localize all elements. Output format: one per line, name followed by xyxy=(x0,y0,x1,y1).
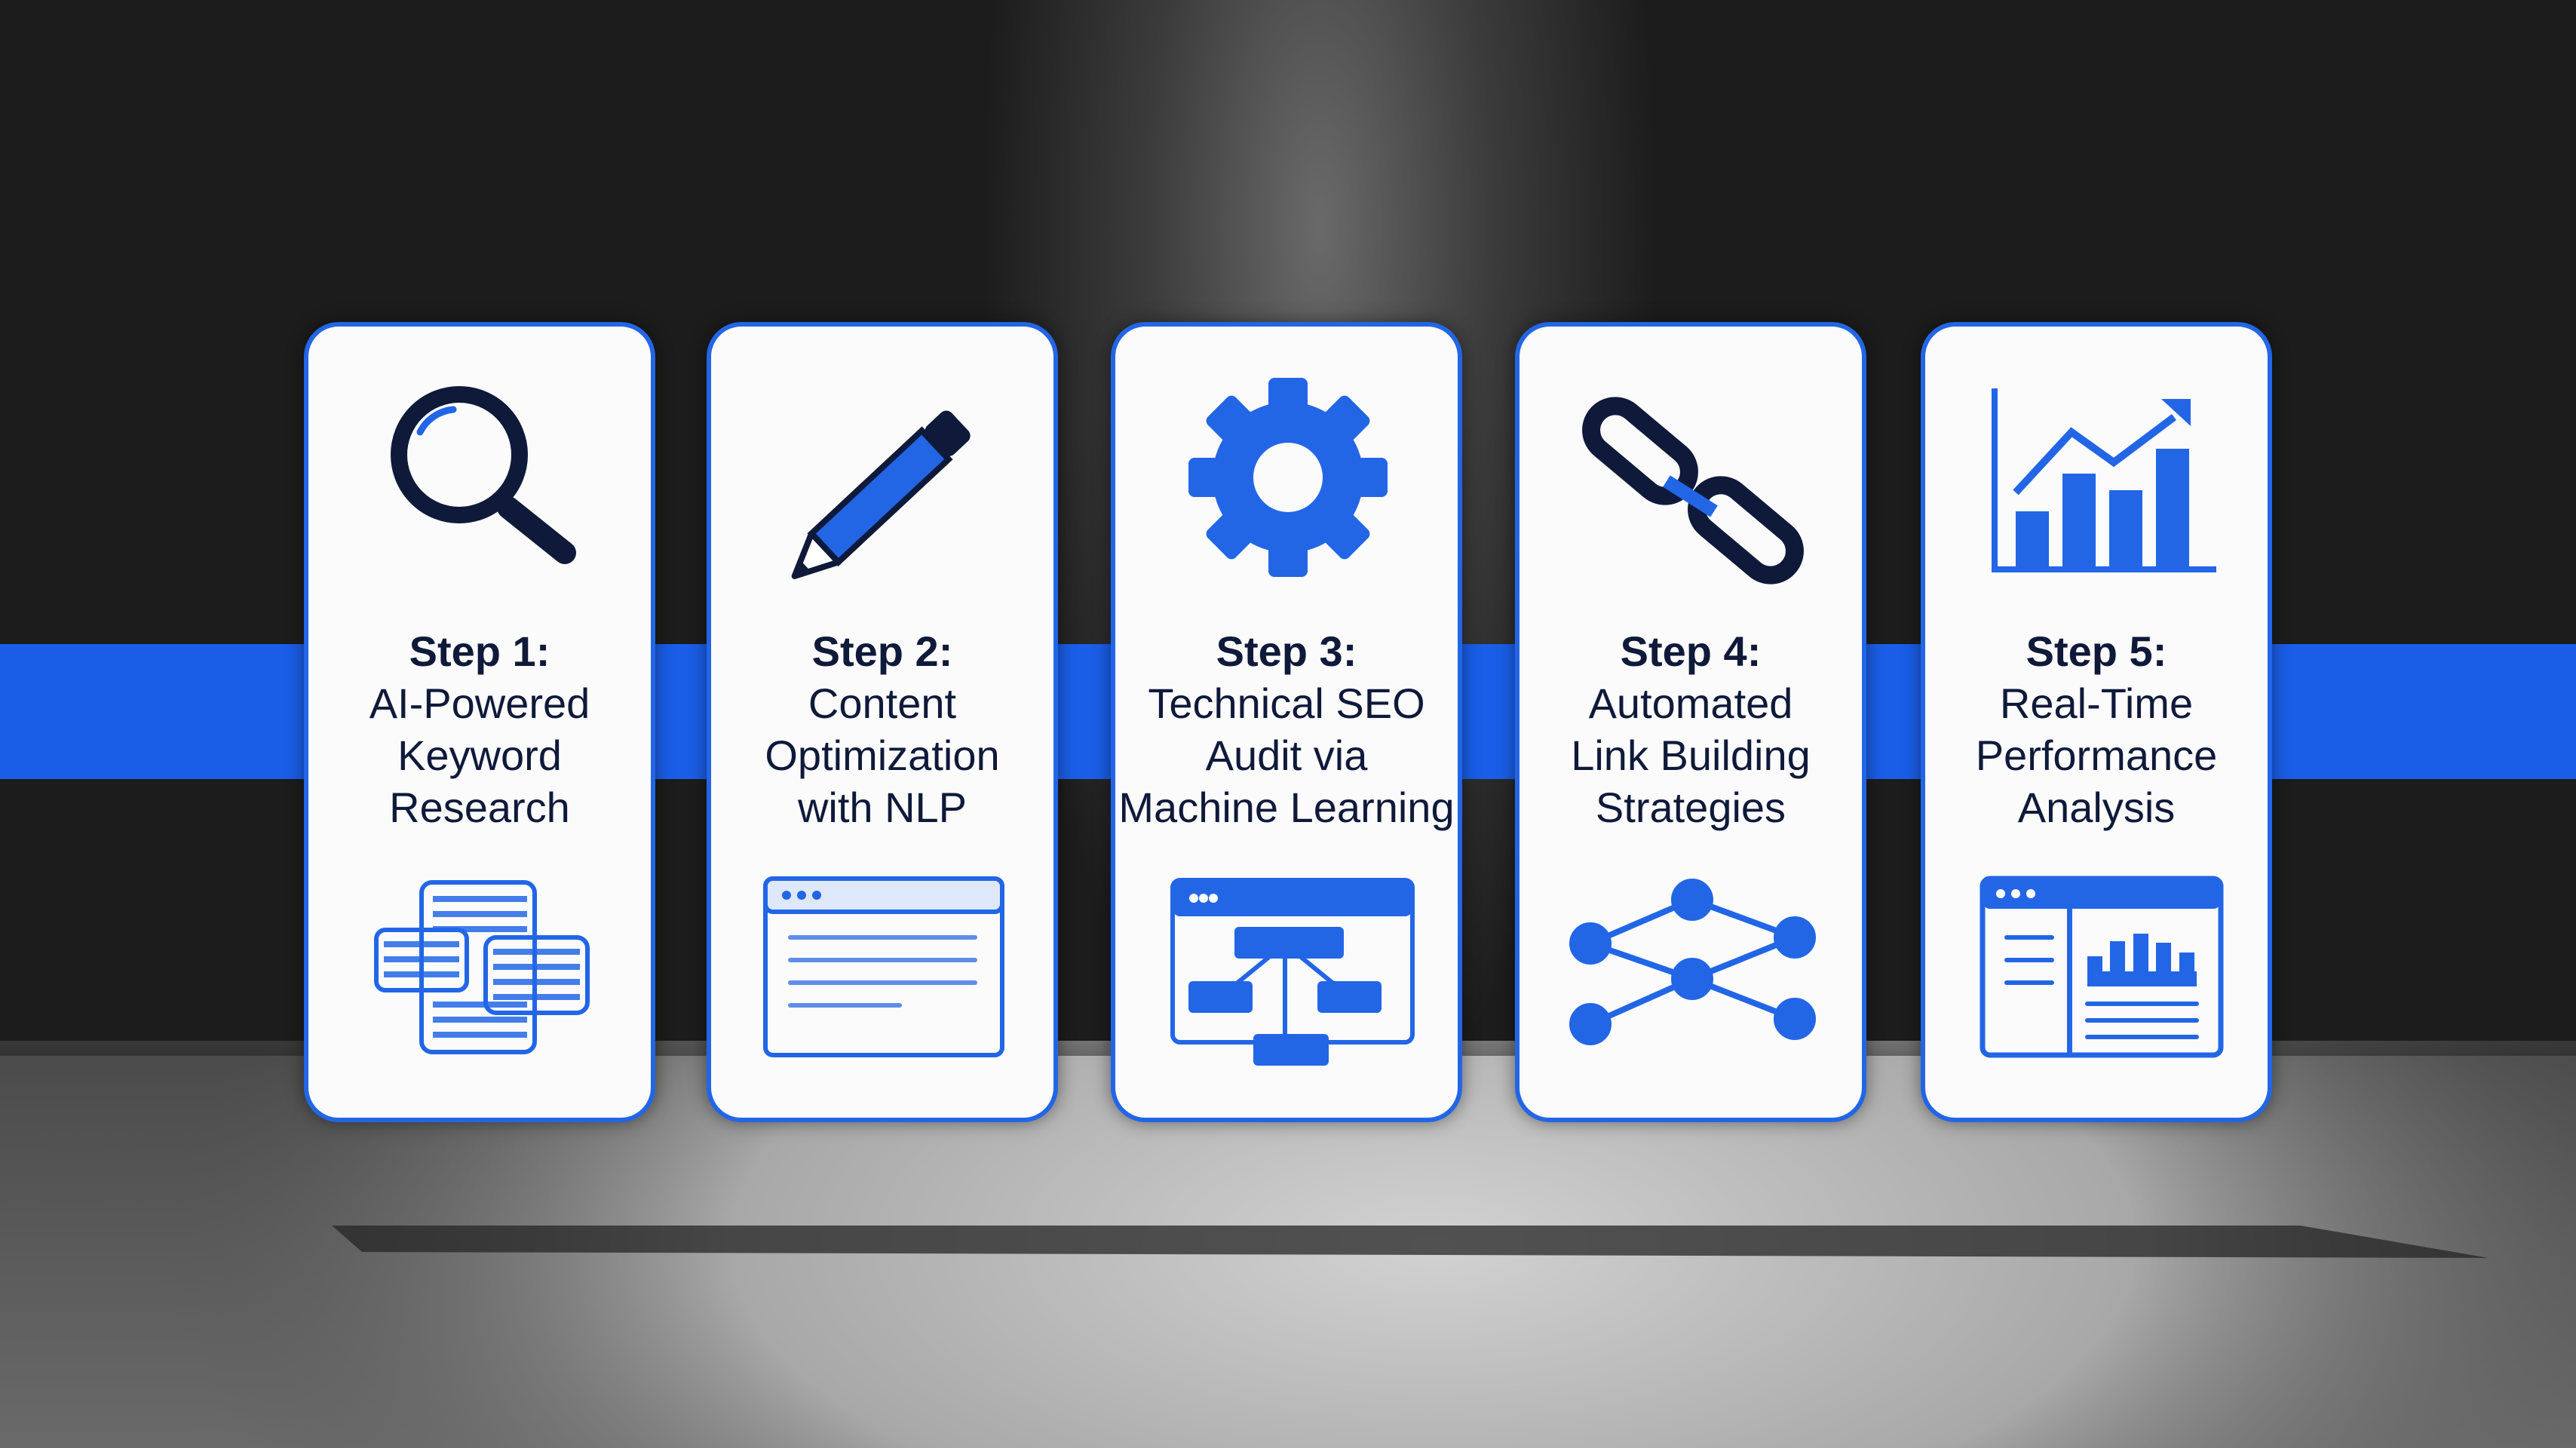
text: step 4: Step 4: xyxy=(1621,627,1761,675)
card 2 xyxy=(707,322,1058,1122)
text: step 2: Optimization xyxy=(765,732,1000,779)
icon: sitemap window xyxy=(1173,880,1412,1066)
icon: pencil xyxy=(780,407,974,591)
card 1 xyxy=(304,322,655,1122)
text: step 5 xyxy=(1976,627,2217,831)
text: step 3 xyxy=(1118,627,1455,831)
text: step 3: Machine Learning xyxy=(1118,784,1455,831)
icon: document window xyxy=(765,879,1002,1055)
icon: magnifier xyxy=(399,394,565,553)
text: step 3: Step 3: xyxy=(1216,627,1357,675)
text: step 1 xyxy=(370,627,590,831)
text: step 5: Analysis xyxy=(2018,784,2175,831)
icon: chain xyxy=(1581,396,1805,585)
text: step 5: Performance xyxy=(1976,732,2217,779)
text: step 4 xyxy=(1571,627,1811,831)
text: step 1: Step 1: xyxy=(409,627,550,675)
text: step 4: Automated xyxy=(1589,680,1792,727)
icon: dotted puzzle xyxy=(376,882,587,1052)
text: step 2: with NLP xyxy=(798,784,967,831)
blue band xyxy=(0,644,2576,779)
icon: dashboard window xyxy=(1983,879,2221,1055)
text: step 4: Link Building xyxy=(1571,732,1811,779)
text: step 4: Strategies xyxy=(1596,784,1786,831)
text: step 2: Step 2: xyxy=(812,627,952,675)
text: step 2: Content xyxy=(808,680,956,727)
icon: network xyxy=(1572,882,1813,1042)
card 5 xyxy=(1921,322,2272,1122)
text: step 1: AI-Powered xyxy=(370,680,590,727)
icon: bar chart xyxy=(1992,388,2216,572)
text: step 5: Real-Time xyxy=(2000,680,2193,727)
text: step 3: Audit via xyxy=(1206,732,1367,779)
icon: gear xyxy=(1188,378,1388,577)
text: step 2 xyxy=(765,627,1000,831)
text: step 5: Step 5: xyxy=(2026,627,2167,675)
text: step 3: Technical SEO xyxy=(1148,680,1425,727)
text: step 1: Keyword xyxy=(397,732,562,779)
text: step 1: Research xyxy=(389,784,570,831)
card 3 xyxy=(1111,322,1462,1122)
card 4 xyxy=(1515,322,1866,1122)
